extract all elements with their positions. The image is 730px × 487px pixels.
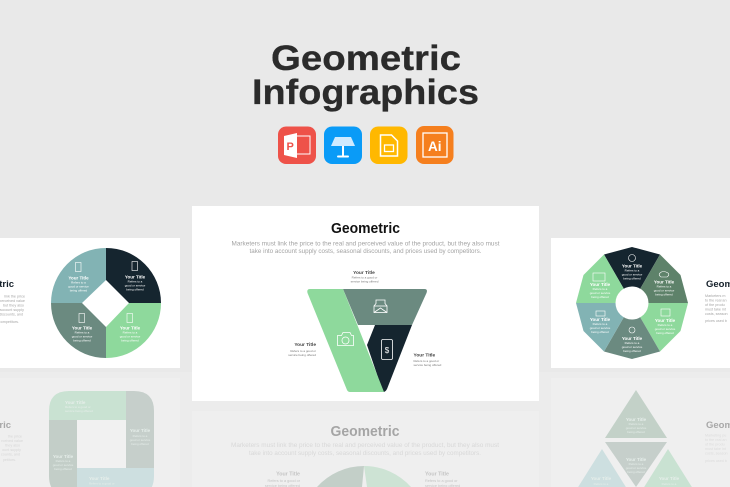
faded ring labels: Your Title [130, 428, 151, 433]
faded slide description: Marketers must link the price to the real and perceived value of the product, but they also must [231, 442, 499, 449]
icon: phone [382, 340, 392, 360]
faded label: right: Refers to a good or [425, 479, 458, 483]
icon: PowerPoint [278, 126, 316, 164]
faded triangle labels: Refers to a [629, 422, 644, 426]
label: right: Your Title [414, 352, 436, 358]
label: right: service being offered [414, 363, 442, 367]
label: left: Your Title [294, 342, 316, 348]
clipped description: link the price [4, 294, 25, 298]
segment: green [307, 289, 384, 392]
icon: Illustrator [416, 126, 454, 164]
faded ring labels: good or service [53, 463, 74, 467]
donut labels: good or service [125, 284, 146, 288]
dodecagon labels: Refers to a [657, 284, 672, 288]
faded label: left: Your Title [276, 472, 300, 478]
faded description [705, 434, 728, 463]
donut labels: Your Title [72, 326, 93, 330]
icon: PowerPoint: P [286, 141, 294, 153]
slide card: right dodecagon [551, 238, 730, 368]
clipped description: Marketers m [705, 294, 726, 298]
faded description: to the real an [705, 438, 727, 442]
faded ring labels: Refers to a [133, 434, 148, 438]
dodecagon labels: Refers to a [625, 341, 640, 345]
dodecagon labels: being offered [623, 349, 641, 353]
clipped description: account supply [0, 308, 24, 312]
clipped description: to the real an [705, 298, 727, 302]
slide description: Marketers must link the price to the real and perceived value of the product, but they also must [232, 240, 500, 248]
dodecagon labels: being offered [591, 295, 609, 299]
faded ring labels [53, 400, 151, 486]
faded description [1, 434, 23, 462]
main title [252, 39, 479, 112]
faded triangle labels: being offered [627, 470, 645, 474]
faded description: costs, season [705, 452, 728, 456]
clipped description: costs, season [705, 312, 728, 316]
label: left: service being offered [288, 353, 316, 357]
donut labels: Refers to a [123, 330, 138, 334]
faded description: the price [8, 434, 22, 438]
faded description: petitors. [3, 458, 16, 462]
faded description: must take int [705, 447, 726, 451]
segment: dark [367, 325, 412, 392]
faded triangle labels [591, 417, 680, 486]
faded slide card: lower center pie [192, 411, 539, 487]
clipped description: of the produ [705, 303, 725, 307]
rounded square ring [49, 391, 154, 487]
clipped description: prices used b [705, 319, 727, 323]
faded triangle labels: good or service [626, 426, 647, 430]
faded description: rceived value [1, 439, 23, 443]
donut labels: being offered [70, 288, 88, 292]
dodecagon labels: Your Title [655, 318, 676, 323]
donut labels: Refers to a [71, 280, 86, 284]
faded triangle labels: Your Title [591, 476, 612, 481]
faded ring labels: Your Title [89, 476, 110, 481]
dodecagon icons [593, 254, 670, 333]
donut labels: being offered [73, 338, 91, 342]
faded ring labels: Your Title [53, 454, 74, 459]
faded ring labels: being offered [54, 467, 72, 471]
dodecagon labels: good or service [654, 288, 675, 292]
icon: Google Slides [370, 126, 408, 164]
donut labels: Your Title [68, 276, 89, 280]
faded triangle labels: Refers to a [629, 462, 644, 466]
label: top [351, 270, 379, 284]
dodecagon labels: Your Title [590, 282, 611, 287]
app icon row [278, 126, 454, 164]
faded description: Marketing pu [705, 434, 726, 438]
faded slide card: lower left rounded square [0, 378, 180, 487]
slide card: center triangle [192, 206, 539, 401]
faded label: left [265, 472, 301, 487]
dodecagon labels: good or service [622, 272, 643, 276]
faded label: right [425, 472, 460, 487]
donut labels: good or service [72, 334, 93, 338]
faded description: ount supply [2, 448, 21, 452]
donut labels: Refers to a [75, 330, 90, 334]
faded label: left: Refers to a good or [267, 479, 301, 483]
slide card: left donut [0, 238, 180, 368]
faded triangle labels: Your Title [626, 457, 647, 462]
dodecagon labels: good or service [655, 327, 676, 331]
faded slide heading: Geometric [330, 424, 400, 440]
faded triangle labels: Your Title [659, 476, 680, 481]
donut icons [76, 262, 138, 322]
dodecagon labels: being offered [623, 276, 641, 280]
dodecagon labels: good or service [590, 326, 611, 330]
donut labels: Your Title [125, 274, 146, 280]
segmented donut chart [51, 248, 161, 358]
donut labels: Your Title [120, 326, 141, 330]
faded description: prices used b [705, 459, 727, 463]
faded pie chart [317, 466, 411, 487]
icon: Illustrator: Ai [428, 139, 442, 154]
dodecagon labels [590, 264, 676, 353]
dodecagon labels: Refers to a [593, 322, 608, 326]
icon: Keynote [324, 126, 362, 164]
faded ring labels: good or service [130, 438, 151, 442]
dodecagon labels: Refers to a [658, 323, 673, 327]
label: top: Your Title [353, 270, 375, 276]
dodecagon labels: being offered [656, 331, 674, 335]
segment: gray [343, 289, 427, 325]
faded ring labels: Your Title [65, 400, 86, 405]
faded ring labels: Refers to a good or [65, 405, 91, 409]
clipped description [0, 294, 25, 324]
faded label: right: Your Title [425, 472, 449, 478]
dodecagon labels: Your Title [622, 336, 643, 341]
label: top: Refers to a good or [352, 276, 377, 280]
main title: Geometric [271, 39, 461, 78]
clipped description: but they also [3, 304, 24, 308]
dodecagon labels: Your Title [622, 264, 643, 268]
main title: Infographics [252, 73, 479, 112]
faded slide card: lower right triangles [551, 378, 730, 487]
faded description: of the produ [705, 442, 725, 446]
faded ring labels: Refers to a good or [89, 482, 115, 486]
faded triangle labels: being offered [627, 430, 645, 434]
donut labels: good or service [68, 284, 89, 288]
clipped description: must take int [705, 308, 726, 312]
faded ring labels: Refers to a [56, 459, 71, 463]
triangle diagram [307, 289, 427, 392]
faded triangle labels: Your Title [626, 417, 647, 422]
label: left: Refers to a good or [290, 349, 316, 353]
clipped description [705, 294, 728, 323]
donut labels: good or service [120, 334, 141, 338]
faded slide description [231, 442, 499, 457]
label: right: Refers to a good or [414, 359, 439, 363]
donut labels [68, 274, 146, 342]
dodecagon labels: Refers to a [625, 268, 640, 272]
faded ring labels: service being offered [65, 409, 93, 413]
faded triangle labels: good or service [626, 466, 647, 470]
faded slide description: take into account supply costs, seasonal discounts, and prices used by competitors. [249, 450, 481, 457]
dodecagon labels: being offered [655, 292, 673, 296]
icon: envelope [374, 300, 387, 312]
dodecagon labels: Refers to a [593, 287, 608, 291]
faded triangle labels: Refers to a [662, 482, 677, 486]
triangle cluster [570, 390, 700, 487]
dodecagon chart [576, 247, 688, 359]
faded description: counts, and [1, 452, 20, 456]
dodecagon labels: good or service [622, 345, 643, 349]
donut labels: being offered [126, 288, 144, 292]
donut labels: being offered [121, 338, 139, 342]
dodecagon labels: good or service [590, 291, 611, 295]
slide description: take into account supply costs, seasonal discounts, and prices used by competitors. [250, 248, 482, 255]
dodecagon labels: Your Title [654, 280, 675, 284]
dodecagon labels: being offered [591, 330, 609, 334]
faded description: they also [5, 444, 20, 448]
slide heading: Geometric [331, 221, 400, 237]
icon: phone: $ [385, 346, 390, 355]
icon: camera [338, 332, 354, 346]
slide description [232, 240, 500, 255]
faded triangle labels: Refers to a [594, 482, 609, 486]
donut labels: Refers to a [128, 280, 143, 284]
label: left [288, 342, 316, 357]
dodecagon labels: Your Title [590, 317, 611, 322]
faded ring labels: being offered [131, 442, 149, 446]
label: right [414, 352, 442, 367]
label: top: service being offered [351, 280, 379, 284]
